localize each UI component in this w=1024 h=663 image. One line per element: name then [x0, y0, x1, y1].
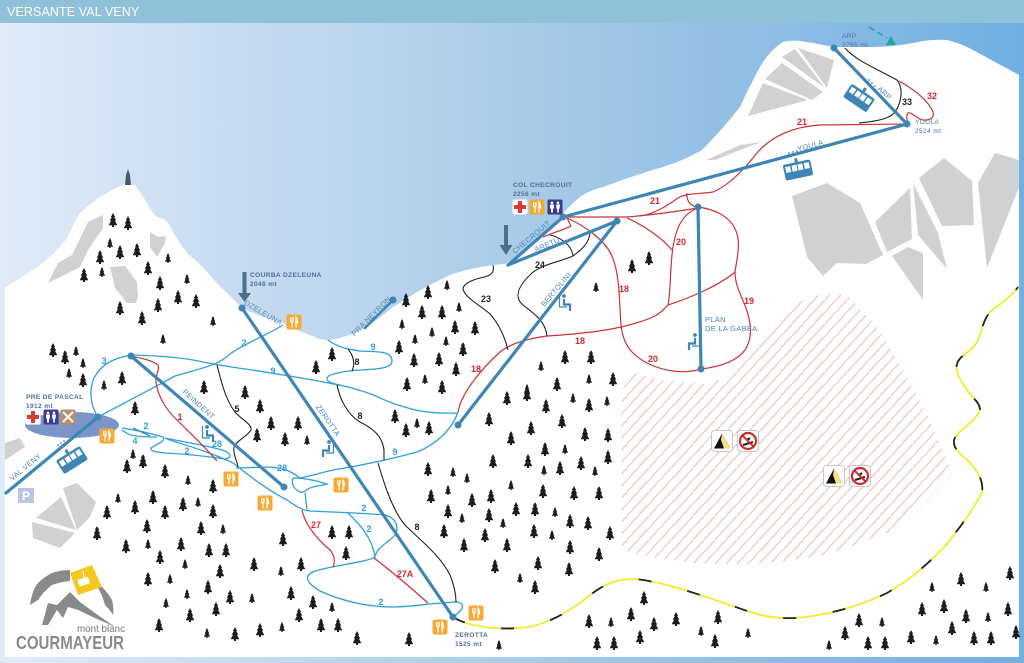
piste numbers: 32 [927, 91, 937, 101]
station names and altitudes: 2256 mt [513, 191, 540, 198]
black pistes [217, 48, 901, 602]
teal direction arrow [869, 27, 896, 45]
station names and altitudes: 2524 mt [915, 128, 941, 135]
lift names: PRA NEYRON [350, 295, 393, 338]
chairlift icons [202, 294, 700, 457]
lift names: CHECROUIT [510, 218, 552, 256]
blue pistes [91, 325, 463, 617]
lift names: ARP [876, 84, 894, 102]
piste numbers: 27 [311, 520, 321, 530]
piste numbers: 2 [184, 446, 190, 456]
piste numbers: 19 [744, 296, 754, 306]
lift names: ARETU [533, 235, 561, 254]
lift terminals [94, 44, 910, 620]
avalanche and no-ski warning signs [712, 430, 870, 486]
piste numbers [101, 91, 937, 607]
piste numbers: 9 [270, 366, 276, 376]
top title bar [0, 0, 1024, 23]
piste numbers: 2 [361, 503, 367, 513]
lift names: VAL VENY [8, 451, 43, 483]
lift names: DZELEUNA [243, 298, 284, 327]
station names and altitudes: 1525 mt [455, 641, 482, 648]
title: VERSANTE VAL VENY [7, 5, 140, 19]
piste numbers: 5 [234, 404, 240, 414]
piste numbers: 27A [397, 569, 414, 579]
Courmayeur logo: COURMAYEUR [16, 633, 124, 653]
gondola icons [54, 79, 877, 474]
piste numbers: 28 [277, 463, 287, 473]
station names and altitudes: 1912 mt [26, 403, 53, 410]
piste numbers: 21 [650, 196, 660, 206]
lift names: PEINDENT [181, 387, 217, 421]
piste numbers: 2 [378, 597, 384, 607]
first aid and toilet icons [26, 200, 562, 424]
restaurant icons [100, 200, 544, 634]
station names and altitudes: ZEROTTA [455, 632, 488, 639]
piste numbers: 2 [241, 338, 247, 348]
avalanche hazard hatched area [621, 294, 952, 565]
piste numbers: 8 [414, 522, 420, 532]
piste numbers: 24 [535, 260, 545, 270]
piste numbers: 2 [366, 524, 372, 534]
piste numbers: 18 [575, 336, 585, 346]
lift names: DE LA GABBA [705, 324, 758, 333]
piste numbers: 33 [902, 97, 912, 107]
parking sign [18, 488, 34, 503]
piste numbers: 2 [143, 421, 149, 431]
piste numbers: 18 [619, 284, 629, 294]
piste numbers: 20 [648, 354, 658, 364]
piste numbers: 9 [392, 447, 398, 457]
piste numbers: 9 [370, 342, 376, 352]
piste numbers: 8 [357, 411, 363, 421]
station names and altitudes: COURBA DZELEUNA [250, 272, 322, 279]
piste numbers: 4 [132, 436, 138, 446]
station names and altitudes: COL CHECROUIT [513, 182, 572, 189]
piste numbers: 23 [481, 294, 491, 304]
piste numbers: 21 [797, 117, 807, 127]
station names and altitudes: 2048 mt [250, 281, 277, 288]
station names and altitudes: 2755 mt [842, 42, 868, 49]
lift names [8, 84, 894, 483]
red pistes [131, 81, 933, 603]
piste numbers: 18 [471, 364, 481, 374]
Courmayeur logo: mont blanc [77, 623, 125, 635]
piste numbers: 20 [676, 237, 686, 247]
ski lifts [6, 48, 907, 617]
piste numbers: 8 [354, 357, 360, 367]
trees [49, 213, 1020, 650]
station names and altitudes: ARP [842, 33, 857, 40]
parking sign: P [22, 489, 30, 503]
yellow and black boundary line [453, 287, 1018, 628]
grey down arrows [238, 225, 512, 302]
blue ellipse at Pre de Pascal [25, 412, 119, 438]
piste numbers: 28 [212, 439, 222, 449]
statue on the summit [125, 169, 131, 185]
lift names: PLAN [705, 315, 726, 324]
piste numbers: 1 [177, 412, 183, 422]
rock faces [5, 48, 1019, 548]
station names and altitudes: PRE DE PASCAL [26, 394, 84, 401]
Courmayeur logo [16, 565, 125, 653]
lift names: BERTOLINI [539, 270, 573, 308]
station names and altitudes: YOULA [915, 119, 939, 126]
piste numbers: 3 [101, 356, 107, 366]
lift names: YOULA [796, 138, 825, 153]
lift names: ZEROTTA [314, 403, 342, 438]
